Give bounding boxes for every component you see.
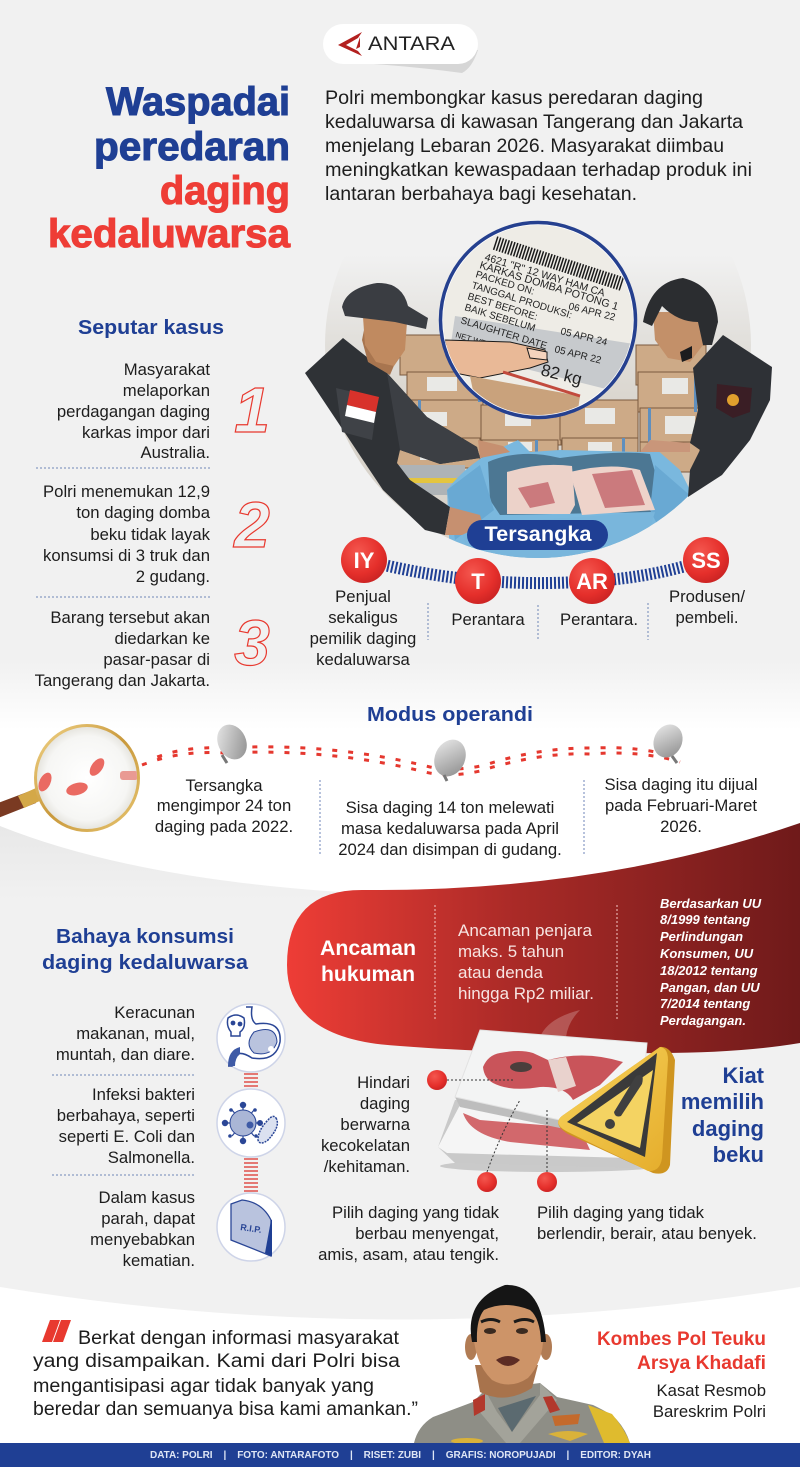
magnified meat label: BEST BEFORE:	[466, 291, 539, 323]
illustration: police inspecting expired meat	[300, 215, 780, 560]
magnified meat label	[438, 220, 638, 420]
icon connectors	[244, 1074, 258, 1191]
logo: ANTARA	[323, 24, 478, 73]
speaker name and role: Bareskrim Polri	[653, 1402, 766, 1421]
case item 1: karkas impor dari	[82, 423, 210, 442]
magnified meat label: 05 APR 24	[559, 326, 609, 349]
case item 3: pasar-pasar di	[103, 650, 210, 669]
magnified meat label: SLAUGHTER DATE	[459, 315, 549, 352]
tip 2 text: amis, asam, atau tengik.	[318, 1245, 499, 1264]
title	[48, 80, 291, 256]
title: peredaran	[94, 125, 290, 169]
suspect descriptions: Perantara	[451, 610, 525, 629]
modus step 1	[155, 776, 293, 836]
suspect descriptions: Perantara.	[560, 610, 638, 629]
case item 2: 2 gudang.	[136, 567, 210, 586]
intro text: menjelang Lebaran 2026. Masyarakat diimbau	[325, 135, 724, 157]
panel: Ancaman hukuman: Berdasarkan UU	[660, 896, 762, 911]
magnified meat label: NET WEIG	[454, 330, 495, 350]
tip 1 text: Hindari	[357, 1073, 410, 1092]
danger 1 text: muntah, dan diare.	[56, 1045, 195, 1064]
danger 2 text: berbahaya, seperti	[57, 1106, 195, 1125]
quote mark	[42, 1320, 71, 1342]
heading: Kiat memilih daging beku	[681, 1063, 765, 1167]
modus step 2: 2024 dan disimpan di gudang.	[338, 840, 562, 859]
danger 2 text	[57, 1085, 195, 1167]
modus step 2: Sisa daging 14 ton melewati	[346, 798, 554, 817]
panel: Ancaman hukuman: hingga Rp2 miliar.	[458, 985, 594, 1003]
magnified meat label: KARKAS DOMBA POTONG 1	[478, 259, 620, 313]
case item 2: beku tidak layak	[90, 525, 211, 544]
marker dots and leader lines	[427, 1070, 557, 1192]
tip 3 text: Pilih daging yang tidak	[537, 1203, 705, 1222]
number 2: 2	[233, 489, 270, 561]
suspect descriptions: Produsen/	[669, 587, 745, 606]
icon: virus and bacteria	[217, 1089, 285, 1157]
logo: ANTARA: ANTARA	[368, 34, 455, 55]
modus step 1: mengimpor 24 ton	[157, 796, 291, 815]
case item 1: Masyarakat	[124, 360, 210, 379]
case item 3: Tangerang dan Jakarta.	[35, 671, 210, 690]
case item 1: melaporkan	[123, 381, 210, 400]
number 3: 3	[234, 607, 270, 679]
magnifying glass	[0, 724, 140, 832]
magnified meat label: 05 APR 22	[553, 344, 603, 367]
case item 1: perdagangan daging	[57, 402, 210, 421]
suspect AR: AR	[576, 569, 608, 594]
smoke over tray	[540, 1010, 580, 1037]
intro text: Polri membongkar kasus peredaran daging	[325, 87, 703, 109]
panel: Ancaman hukuman	[287, 823, 800, 1053]
icon: stomach and skull	[217, 1004, 285, 1072]
scene: cardboard boxes	[325, 287, 751, 545]
heading: Modus operandi: Modus operandi	[367, 703, 533, 726]
suspect AR	[569, 558, 615, 604]
suspect descriptions: pembeli.	[675, 608, 739, 627]
tip 2 text: Pilih daging yang tidak	[332, 1203, 500, 1222]
danger 1 text	[56, 1003, 195, 1064]
quote text: yang disampaikan. Kami dari Polri bisa	[33, 1351, 400, 1372]
panel: Ancaman hukuman: maks. 5 tahun	[458, 943, 564, 961]
intro text: lantaran berbahaya bagi kesehatan.	[325, 183, 637, 205]
intro text: meningkatkan kewaspadaan terhadap produk ini	[325, 159, 752, 181]
danger 3 text: menyebabkan	[90, 1230, 195, 1249]
panel: Ancaman hukuman: Pangan, dan UU	[660, 980, 760, 995]
suspect descriptions: sekaligus	[328, 608, 398, 627]
tip 2 text: berbau menyengat,	[355, 1224, 499, 1243]
danger 2 text: Salmonella.	[108, 1148, 195, 1167]
danger 2 text: Infeksi bakteri	[92, 1085, 195, 1104]
case item 1: Australia.	[140, 443, 210, 462]
footer credits: DATA: POLRI | FOTO: ANTARAFOTO | RISET: ZUBI | GRAFIS: NOROPUJADI | EDITOR: DYAH	[150, 1450, 651, 1461]
modus step 3: Sisa daging itu dijual	[604, 775, 758, 794]
speaker name and role: Kombes Pol Teuku	[597, 1329, 766, 1350]
panel: Ancaman hukuman: 8/1999 tentang	[660, 912, 750, 927]
heading: Kiat memilih daging beku: Kiat	[722, 1063, 765, 1088]
magnified meat label: 4621 "R" 12 WAY HAM CA	[483, 251, 606, 299]
pin 1	[212, 720, 252, 764]
suspect IY	[341, 537, 387, 583]
magnified meat label: PACKED ON:	[474, 269, 536, 298]
case item 1	[57, 360, 210, 462]
tip 1 text: kecokelatan	[321, 1136, 410, 1155]
danger 3 text: Dalam kasus	[99, 1188, 195, 1207]
case item 3: Barang tersebut akan	[50, 608, 210, 627]
magnified meat label: TANGGAL PRODUKSI:	[470, 280, 573, 321]
panel: Ancaman hukuman: hukuman	[321, 962, 415, 986]
suspect descriptions: Penjual	[335, 587, 391, 606]
title: Waspadai	[106, 80, 290, 124]
modus step 1: Tersangka	[186, 776, 263, 795]
pin 3	[648, 720, 688, 763]
danger 3 text: kematian.	[123, 1251, 195, 1270]
tip 2 text	[318, 1203, 500, 1264]
quote text	[33, 1328, 418, 1420]
quote text: beredar dan semuanya bisa kami amankan.”	[33, 1399, 418, 1420]
suspect descriptions	[310, 587, 745, 669]
danger 1 text: makanan, mual,	[76, 1024, 195, 1043]
suspect IY: IY	[354, 548, 375, 573]
case item 3	[35, 608, 210, 690]
suspect descriptions: pemilik daging	[310, 629, 416, 648]
intro text: kedaluwarsa di kawasan Tangerang dan Jakarta	[325, 111, 743, 133]
danger 3 text	[90, 1188, 195, 1270]
speaker name and role: Kasat Resmob	[657, 1381, 766, 1400]
panel: Ancaman hukuman: 18/2012 tentang	[660, 963, 758, 978]
number 1: 1	[234, 374, 270, 446]
quote text: Berkat dengan informasi masyarakat	[78, 1328, 400, 1349]
panel: Ancaman hukuman: Ancaman penjara	[458, 922, 593, 940]
officer portrait	[414, 1285, 630, 1444]
intro text	[325, 87, 752, 205]
panel: Ancaman hukuman: Perlindungan	[660, 929, 743, 944]
tip 1 text: /kehitaman.	[324, 1157, 410, 1176]
police officer right	[640, 278, 772, 497]
modus step 1: daging pada 2022.	[155, 817, 293, 836]
tip 1 text	[321, 1073, 411, 1176]
heading: Tersangka: Tersangka	[484, 523, 592, 546]
panel: Ancaman hukuman: Konsumen, UU	[660, 946, 754, 961]
heading: Bahaya konsumsi daging kedaluwarsa	[42, 925, 249, 974]
heading: Bahaya konsumsi daging kedaluwarsa: daging kedaluwarsa	[42, 951, 249, 974]
case item 2	[43, 482, 211, 586]
modus step 3: 2026.	[660, 817, 702, 836]
tip 3 text	[537, 1203, 757, 1243]
blue plastic bag with meat	[447, 440, 695, 560]
police officer left	[305, 283, 510, 535]
icon: gravestone: R.I.P.	[240, 1222, 262, 1235]
panel: Ancaman hukuman: Ancaman	[320, 936, 416, 960]
panel: Ancaman hukuman: 7/2014 tentang	[660, 996, 750, 1011]
suspect T: T	[471, 569, 485, 594]
danger 1 text: Keracunan	[114, 1003, 195, 1022]
suspect T	[455, 558, 501, 604]
icon: gravestone	[217, 1193, 285, 1261]
panel: Ancaman hukuman: atau denda	[458, 964, 544, 982]
modus step 3	[604, 775, 758, 836]
speaker name and role	[597, 1329, 766, 1421]
modus step 2: masa kedaluwarsa pada April	[341, 819, 559, 838]
heading: Bahaya konsumsi daging kedaluwarsa: Bahaya konsumsi	[56, 925, 234, 948]
footer credits	[0, 1443, 800, 1467]
danger 3 text: parah, dapat	[101, 1209, 195, 1228]
tip 1 text: daging	[360, 1094, 410, 1113]
meat tray illustration	[438, 1030, 660, 1172]
case item 2: konsumsi di 3 truk dan	[43, 546, 210, 565]
danger 2 text: seperti E. Coli dan	[59, 1127, 195, 1146]
suspect SS	[683, 537, 729, 583]
suspects chain	[364, 560, 706, 583]
magnified meat label: BAIK SEBELUM	[463, 302, 536, 334]
magnified meat label: 82 kg	[539, 360, 584, 389]
heading: Kiat memilih daging beku: daging	[692, 1116, 764, 1141]
case item 3: diedarkan ke	[114, 629, 210, 648]
suspect SS: SS	[691, 548, 721, 573]
speaker name and role: Arsya Khadafi	[637, 1353, 766, 1374]
heading: Tersangka	[467, 520, 608, 550]
title: kedaluwarsa	[48, 212, 291, 256]
footprints trail	[142, 747, 680, 775]
heading: Kiat memilih daging beku: memilih	[681, 1089, 764, 1114]
modus step 3: pada Februari-Maret	[605, 796, 757, 815]
icon: warning triangle	[558, 1047, 675, 1174]
modus step 2	[338, 798, 562, 859]
suspect descriptions: kedaluwarsa	[316, 650, 411, 669]
panel: Ancaman hukuman: Perdagangan.	[660, 1013, 746, 1028]
pin 2	[428, 734, 472, 782]
case item 2: ton daging domba	[76, 503, 211, 522]
case item 2: Polri menemukan 12,9	[43, 482, 210, 501]
heading: Kiat memilih daging beku: beku	[713, 1142, 764, 1167]
tip 3 text: berlendir, berair, atau benyek.	[537, 1224, 757, 1243]
title: daging	[160, 169, 290, 213]
section heading: Seputar kasus: Seputar kasus	[78, 316, 224, 339]
magnified meat label: 06 APR 22	[567, 301, 617, 324]
tip 1 text: berwarna	[340, 1115, 411, 1134]
quote text: mengantisipasi agar tidak banyak yang	[33, 1376, 374, 1397]
